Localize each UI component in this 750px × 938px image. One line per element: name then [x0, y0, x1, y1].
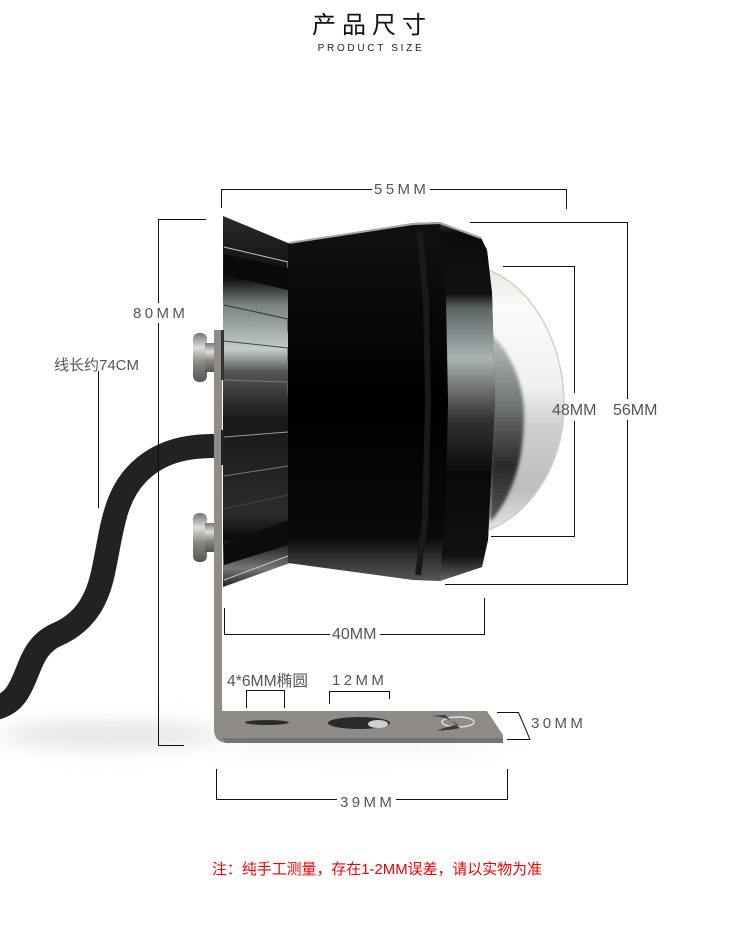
- label 30MM: 30MM: [531, 715, 586, 732]
- heat sink: [223, 216, 290, 587]
- slot hole: [245, 720, 289, 725]
- note: 注：纯手工测量，存在1-2MM误差，请以实物为准: [212, 861, 542, 878]
- title: [312, 12, 432, 54]
- label cable length: 线长约74CM: [54, 357, 139, 374]
- body highlight: [289, 223, 481, 243]
- screws: [193, 333, 215, 562]
- label 12MM: 12MM: [332, 672, 387, 689]
- lens dome: [488, 270, 564, 530]
- title: 产品尺寸: [312, 12, 432, 39]
- dimension lines: [98, 190, 628, 800]
- label 80MM: 80MM: [133, 305, 188, 322]
- title: PRODUCT SIZE: [318, 43, 424, 54]
- label 39MM: 39MM: [340, 794, 395, 811]
- LED lamp: [223, 216, 564, 587]
- label 48MM: 48MM: [552, 402, 596, 419]
- front ring: [440, 222, 495, 581]
- round hole: [328, 717, 390, 729]
- label 40MM: 40MM: [332, 626, 376, 643]
- mounting bracket: [214, 330, 503, 743]
- cable: [0, 446, 214, 708]
- lamp body: [288, 222, 495, 581]
- dimension labels: [54, 181, 657, 811]
- floor shadow: [0, 723, 505, 751]
- body seam: [418, 232, 428, 575]
- label slot: 4*6MM椭圆: [227, 672, 308, 690]
- third hole: [429, 715, 474, 731]
- label 56MM: 56MM: [613, 402, 657, 419]
- label 55MM: 55MM: [374, 181, 429, 198]
